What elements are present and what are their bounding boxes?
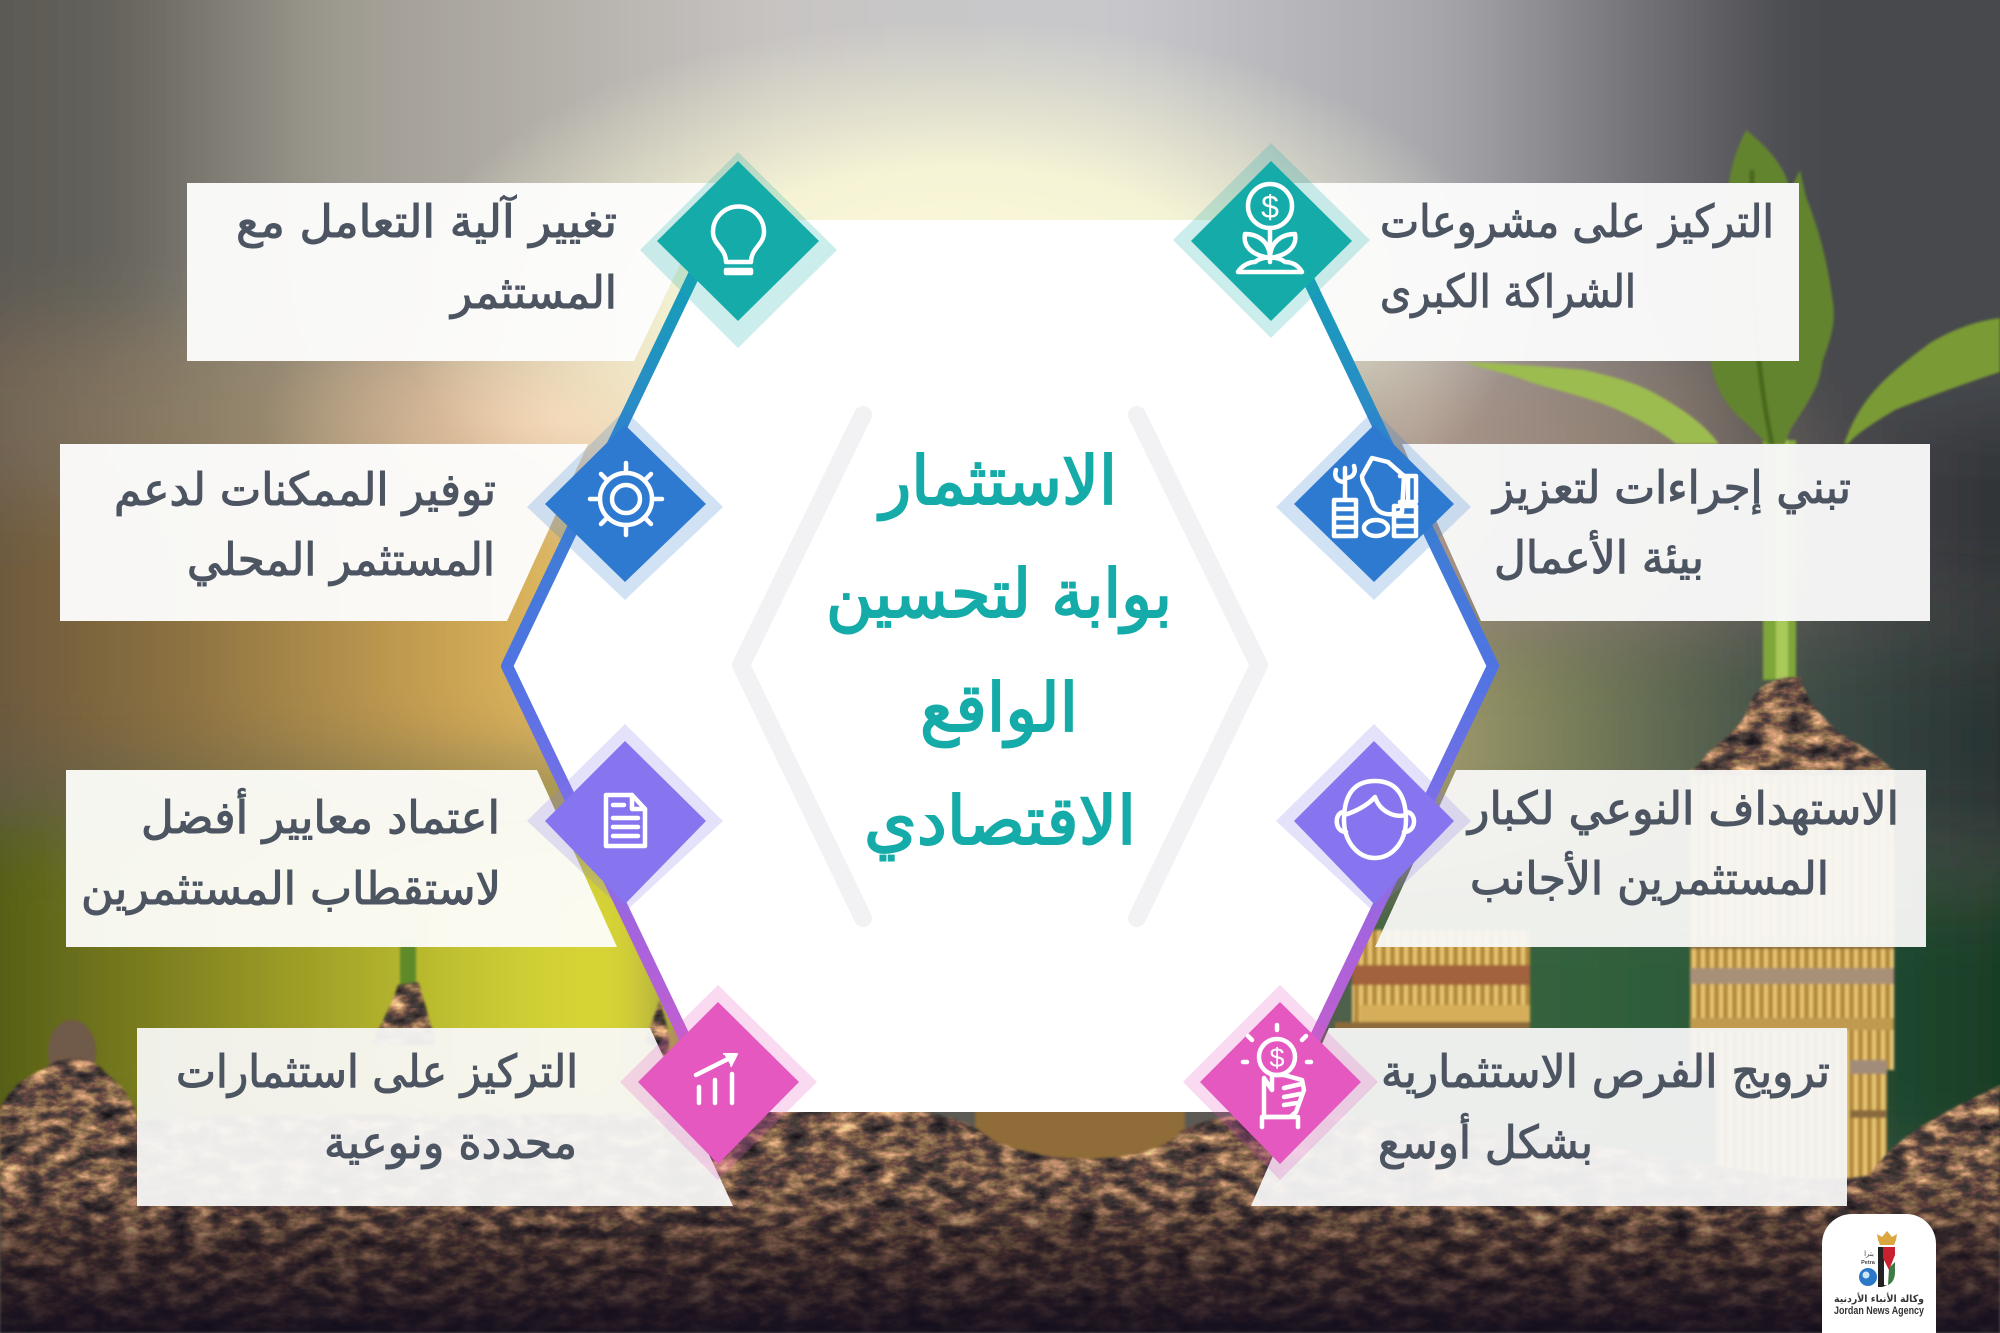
icon: plant growing a dollar coin: $ [1261, 189, 1279, 225]
text: second-right: بيئة الأعمال [1494, 529, 1704, 584]
diamond: document [527, 724, 723, 912]
diamond: plant coin [1173, 143, 1370, 338]
soil [0, 676, 2000, 1333]
logo: Jordan News Agency: Jordan News Agency [1834, 1305, 1925, 1317]
inner left chevron [741, 415, 863, 918]
text: third-left: لاستقطاب المستثمرين [81, 862, 501, 915]
icon: hand holding dollar coin: $ [1269, 1043, 1285, 1073]
text: bottom-left: التركيز على استثمارات [176, 1045, 578, 1098]
text: second-left: المستثمر المحلي [187, 533, 495, 586]
panel: bottom-right card [1251, 1028, 1847, 1206]
text: third-left [81, 788, 501, 915]
text: third-right: الاستهداف النوعي لكبار [1466, 782, 1899, 835]
text: third-right: المستثمرين الأجانب [1470, 850, 1829, 905]
diamond: face [1276, 724, 1471, 912]
text: second-right: تبني إجراءات لتعزيز [1491, 461, 1851, 514]
panel: third-left card [66, 770, 617, 947]
plant [0, 130, 2000, 1180]
logo: Jordan News Agency: وكالة الأنباء الأردنية [1834, 1292, 1924, 1305]
icon: face with headset hair [1337, 781, 1414, 858]
panel: bottom-left card [137, 1028, 733, 1206]
central white hexagon [507, 220, 1493, 1112]
panel: top-left card [187, 183, 719, 361]
diamond: coin in hand [1183, 985, 1378, 1180]
panel: second-left card [60, 444, 588, 621]
text: top-left: تغيير آلية التعامل مع [236, 194, 617, 248]
panel: third-right card [1375, 770, 1926, 947]
text: bottom-right: ترويج الفرص الاستثمارية [1381, 1045, 1830, 1099]
icon: hand holding dollar coin [1243, 1025, 1311, 1127]
left sprout and pot [400, 940, 416, 1000]
icon: hand, sprout and coin stacks [1334, 458, 1416, 536]
title: الاستثمار [877, 442, 1117, 520]
hexagon gradient outline, left [507, 216, 722, 1116]
logo: Jordan News Agency: بترا [1864, 1250, 1874, 1258]
logo: Jordan News Agency: Petra [1861, 1260, 1876, 1266]
title: بوابة لتحسين [826, 555, 1172, 634]
text: bottom-right [1378, 1045, 1830, 1170]
diamond: lightbulb [640, 152, 837, 348]
title: الاقتصادي [864, 782, 1136, 860]
text: top-right: الشراكة الكبرى [1380, 265, 1636, 318]
text: second-left: توفير الممكنات لدعم [114, 463, 496, 516]
icon: lightbulb [713, 207, 764, 273]
diamond: coins and hand [1276, 410, 1471, 600]
icon: rising bar chart [696, 1054, 737, 1103]
text: second-left [114, 463, 496, 586]
diamond: chart [620, 985, 817, 1180]
text: bottom-right: بشكل أوسع [1378, 1113, 1593, 1170]
icon: document [606, 795, 645, 846]
text: third-right [1466, 782, 1899, 905]
logo: Jordan News Agency [1822, 1214, 1936, 1333]
hexagon gradient outline, right [1278, 216, 1493, 1116]
text: top-right [1380, 195, 1774, 318]
panel: top-right card [1260, 183, 1799, 361]
panel: second-right card [1402, 444, 1930, 621]
text: third-left: اعتماد معايير أفضل [141, 788, 500, 844]
text: bottom-left [176, 1045, 578, 1170]
text: bottom-left: محددة ونوعية [324, 1116, 577, 1170]
icon: plant growing a dollar coin [1238, 184, 1302, 272]
inner right chevron [1137, 415, 1259, 918]
icon: gear [590, 463, 662, 535]
text: top-right: التركيز على مشروعات [1380, 195, 1774, 249]
diamond: gear [527, 410, 723, 600]
title [826, 442, 1172, 860]
title: الواقع [920, 669, 1078, 748]
text: top-left: المستثمر [449, 266, 617, 319]
text: top-left [236, 194, 617, 319]
coin stacks [1690, 770, 1894, 1070]
text: second-right [1491, 461, 1851, 584]
